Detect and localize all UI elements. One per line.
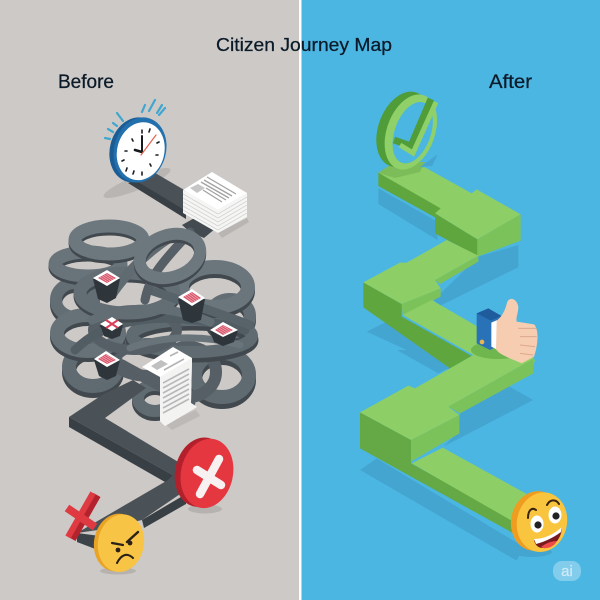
clock shadow xyxy=(101,163,173,203)
segment 5 top xyxy=(412,448,527,522)
segment 1 top xyxy=(378,166,521,239)
icon: paper stack xyxy=(183,172,249,238)
segment 4 top xyxy=(360,350,534,440)
clock hands xyxy=(135,135,156,155)
icon: long document xyxy=(142,347,200,430)
road: clock to paper stack xyxy=(128,170,216,238)
block 1 right side xyxy=(477,214,521,257)
badge: ai xyxy=(553,561,581,581)
after: road shadows xyxy=(367,188,518,370)
segment 2 right side xyxy=(435,256,478,284)
segment 1 side xyxy=(378,173,442,217)
clock alert ticks xyxy=(105,100,165,139)
block 3 and segment 5 side xyxy=(360,412,513,533)
heading: after: After xyxy=(489,72,533,93)
segment 3 top xyxy=(403,300,535,370)
badge: ai: ai xyxy=(561,563,573,580)
checkpoint box 5 xyxy=(94,351,120,380)
segment 4 right side xyxy=(448,358,534,413)
green road: after journey xyxy=(363,166,535,370)
icon: thumbs up xyxy=(471,299,537,363)
icon: red X disk xyxy=(168,433,240,514)
icon: green check ring xyxy=(366,84,447,178)
checkpoint box with x mark xyxy=(100,317,123,339)
heading: before: Before xyxy=(58,72,114,93)
hand xyxy=(496,299,537,363)
icon: clock xyxy=(102,100,174,190)
checkpoint box 2 xyxy=(178,289,205,323)
title: Citizen Journey Map xyxy=(216,34,392,55)
panel: after background xyxy=(300,0,600,600)
road: lower path to red X xyxy=(69,380,186,550)
icon: happy face xyxy=(505,486,573,557)
block 2 and segment 3 side xyxy=(363,282,472,368)
segment 2 top xyxy=(363,240,478,304)
icon: red cross xyxy=(67,493,97,539)
sleeve xyxy=(477,308,502,350)
panel: before background xyxy=(0,0,300,600)
checkpoint box 1 xyxy=(93,270,120,303)
icon: angry face xyxy=(89,510,149,576)
block 1 left side xyxy=(435,213,477,256)
block 3 right side xyxy=(411,415,459,462)
checkpoint box 4 xyxy=(210,322,238,346)
block 2 right side xyxy=(402,288,441,315)
tangled road knot xyxy=(55,226,252,415)
